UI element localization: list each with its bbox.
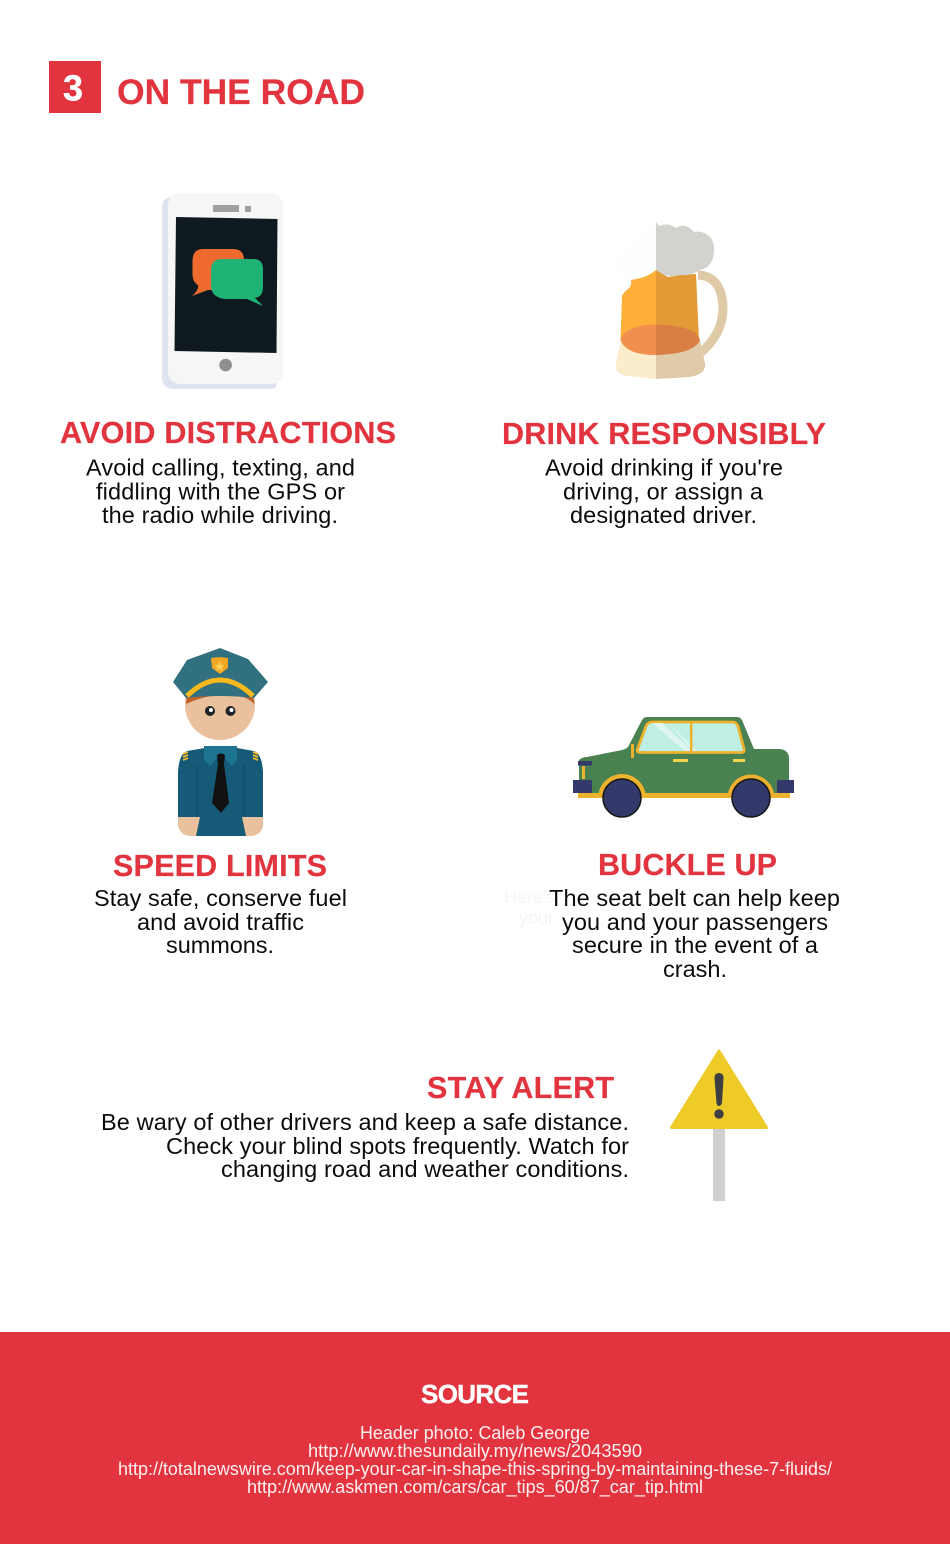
panel: speed limits	[94, 648, 347, 958]
number badge	[49, 61, 101, 113]
body text: Avoid drinking if you're	[545, 454, 783, 480]
body text	[94, 885, 347, 958]
body text	[549, 885, 840, 982]
heading: AVOID DISTRACTIONS	[60, 416, 396, 450]
source list: http://totalnewswire.com/keep-your-car-in-shape-this-spring-by-maintaining-these-7-fluids/	[118, 1459, 832, 1479]
body text: changing road and weather conditions.	[221, 1156, 629, 1182]
icon: warning sign	[672, 1051, 766, 1201]
body text: the radio while driving.	[102, 502, 338, 528]
body text: Be wary of other drivers and keep a safe distance.	[101, 1109, 629, 1135]
body text: The seat belt can help keep	[549, 885, 840, 911]
heading text: ON THE ROAD	[117, 72, 365, 112]
faint ghost text: your	[519, 908, 554, 928]
body text	[86, 454, 355, 528]
body text: and avoid traffic	[137, 909, 304, 935]
body text: fiddling with the GPS or	[96, 478, 345, 504]
body text: secure in the event of a	[572, 932, 819, 958]
icon: beer mug	[616, 222, 723, 379]
heading: STAY ALERT	[427, 1071, 614, 1105]
icon: police officer	[173, 648, 268, 836]
body text: Stay safe, conserve fuel	[94, 885, 347, 911]
panel: avoid distractions	[60, 193, 396, 528]
heading: BUCKLE UP	[598, 848, 777, 882]
body text: you and your passengers	[562, 909, 828, 935]
body text	[545, 454, 783, 528]
number badge: 3	[63, 68, 83, 108]
body text: summons.	[166, 932, 274, 958]
icon: smartphone with chat bubbles	[162, 193, 283, 389]
body text: designated driver.	[570, 502, 757, 528]
heading: DRINK RESPONSIBLY	[502, 417, 826, 451]
source list: http://www.askmen.com/cars/car_tips_60/87_car_tip.html	[247, 1477, 703, 1498]
faint ghost text	[504, 887, 555, 928]
panel: buckle up	[504, 717, 840, 982]
body text: Check your blind spots frequently. Watch for	[166, 1133, 629, 1159]
body text: Avoid calling, texting, and	[86, 454, 355, 480]
footer: source band	[0, 1332, 950, 1544]
icon: green car	[573, 717, 794, 817]
faint ghost text: Here's	[504, 887, 555, 907]
section heading: 3 On the road	[49, 61, 365, 113]
source heading: SOURCE	[421, 1379, 529, 1409]
body text: crash.	[663, 956, 727, 982]
source list: Header photo: Caleb George	[360, 1423, 590, 1443]
panel: stay alert	[101, 1051, 766, 1201]
panel: drink responsibly	[502, 222, 826, 528]
body text: driving, or assign a	[563, 478, 764, 504]
heading: SPEED LIMITS	[113, 849, 327, 883]
source list: http://www.thesundaily.my/news/2043590	[308, 1441, 642, 1461]
body text	[101, 1109, 629, 1182]
source list	[118, 1423, 832, 1498]
